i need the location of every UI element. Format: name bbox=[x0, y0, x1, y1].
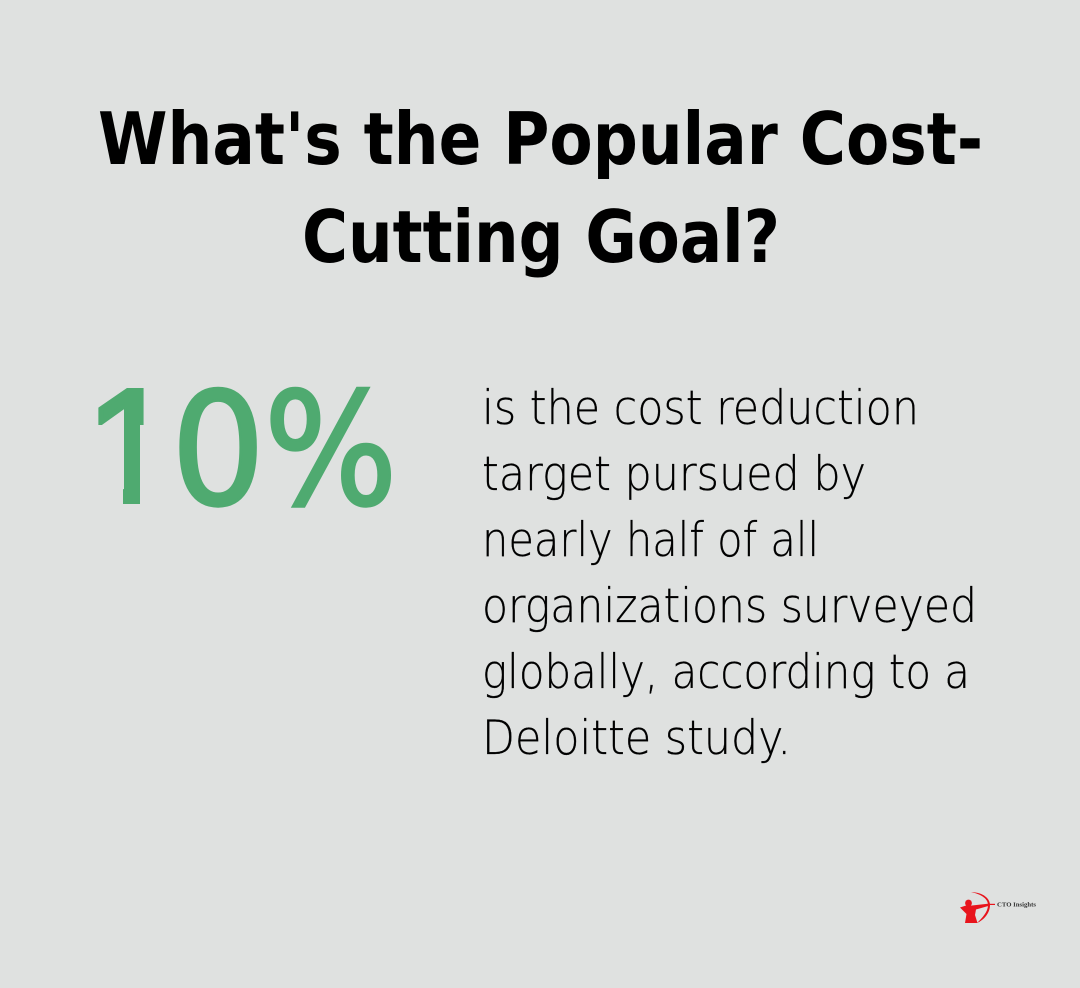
description text: is the cost reduction bbox=[482, 381, 919, 436]
description text: Deloitte study. bbox=[482, 711, 791, 766]
title bbox=[98, 97, 983, 279]
big statistic: 10% bbox=[98, 386, 391, 508]
big statistic: 10%: % bbox=[264, 359, 397, 541]
icon: archer with bow bbox=[960, 892, 995, 923]
logo: CTO Insights archer bbox=[960, 892, 1036, 923]
description text: target pursued by bbox=[482, 447, 866, 502]
description text bbox=[482, 381, 977, 766]
title: Cutting Goal? bbox=[302, 195, 780, 279]
description text: nearly half of all bbox=[482, 513, 819, 568]
big statistic: 10%: 0 bbox=[171, 359, 265, 541]
description text: organizations surveyed bbox=[482, 579, 977, 634]
title: What's the Popular Cost- bbox=[98, 97, 983, 181]
description text: globally, according to a bbox=[482, 645, 970, 700]
logo wordmark: CTO Insights bbox=[997, 902, 1036, 908]
big statistic: 10%: 1 bbox=[85, 355, 177, 539]
